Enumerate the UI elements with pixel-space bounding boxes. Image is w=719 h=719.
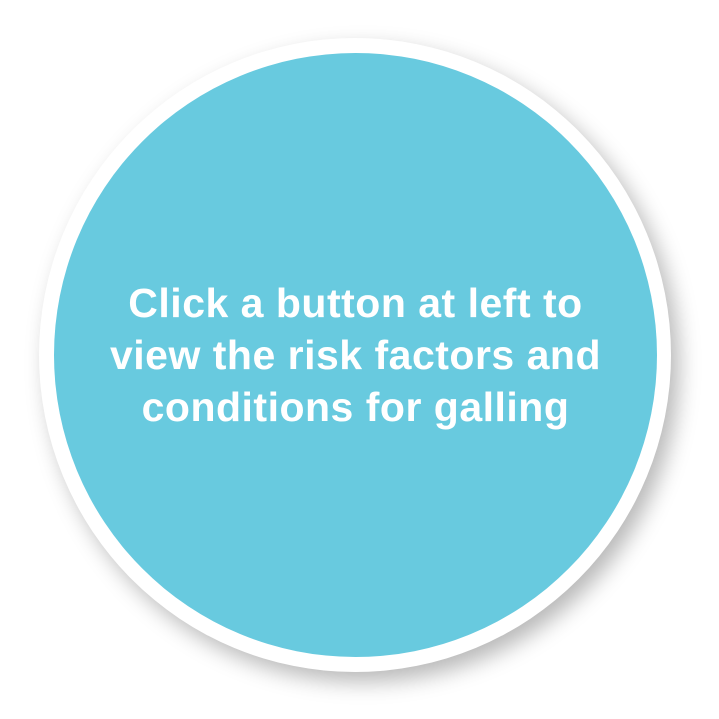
text block: instruction: conditions for galling [142,384,569,430]
text block: instruction: view the risk factors and [110,332,601,378]
panel: outer white ring [39,38,671,672]
text block: instruction: Click a button at left to [128,280,583,326]
panel: blue circle [54,53,657,657]
text block: instruction [110,280,601,430]
